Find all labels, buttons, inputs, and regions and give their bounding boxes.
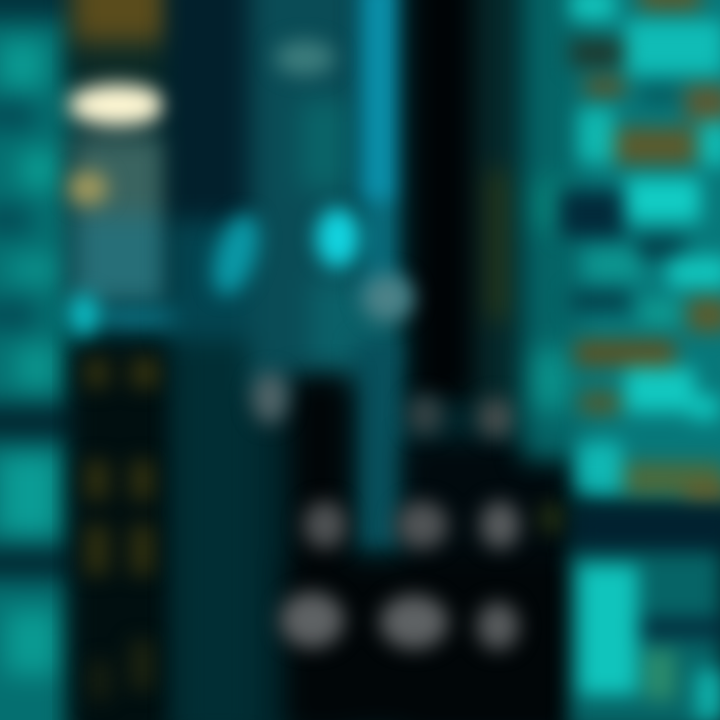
- panel: lamp column: [72, 0, 170, 720]
- icon: lamp glow: [67, 84, 200, 337]
- icon: bright teal highlights: [204, 40, 414, 322]
- panel: grey blurred dots: [252, 372, 566, 650]
- panel: dark lower-centre block: [285, 375, 575, 720]
- panel: centre-left tower: [170, 0, 400, 720]
- panel: bright blue strip: [355, 0, 405, 550]
- panel: right mottled teal column: [522, 0, 720, 500]
- panel: olive window dots: [85, 358, 160, 700]
- panel: black vertical band and right dark strip: [412, 0, 520, 420]
- panel: right teal and olive patches: [560, 0, 720, 504]
- panel: right lower dark band and bright block: [570, 508, 720, 720]
- panel: left teal column: [0, 0, 80, 720]
